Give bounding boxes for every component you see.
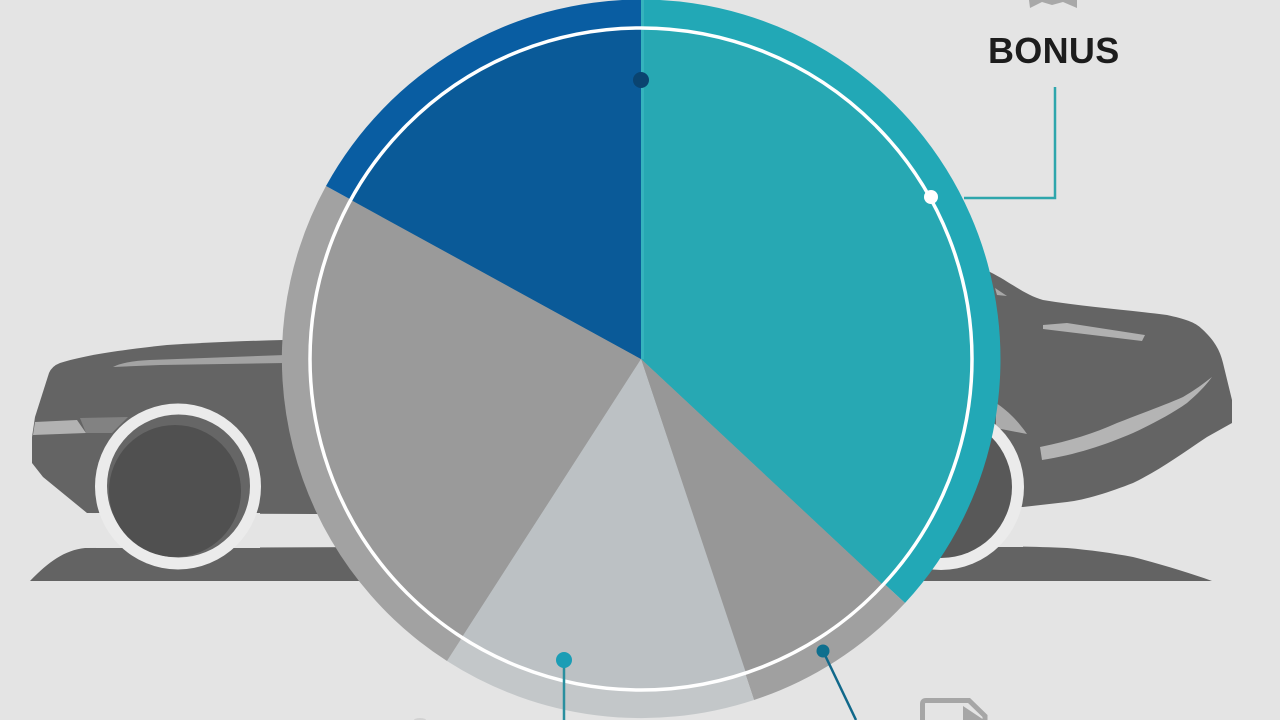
teal edge highlight xyxy=(641,0,644,359)
outer ring: left grey segment xyxy=(282,186,641,661)
car rear body xyxy=(32,340,400,514)
car rear ground shadow xyxy=(30,547,400,581)
slice: right grey xyxy=(641,359,883,673)
car rear light band xyxy=(80,417,128,433)
car rear wheel xyxy=(95,404,261,570)
car rear light xyxy=(33,420,86,435)
icon: bonus ribbon xyxy=(1029,0,1077,8)
outer ring: teal segment xyxy=(641,0,1000,603)
outer ring: right grey segment xyxy=(641,359,905,700)
outer ring: blue segment xyxy=(326,0,641,359)
icon: partial bottom-left mark xyxy=(414,718,426,720)
car front hood highlight xyxy=(1043,323,1145,341)
slice: light grey xyxy=(462,359,746,690)
car silhouette xyxy=(30,260,1232,581)
outer ring: light segment xyxy=(447,359,754,718)
slice: left grey xyxy=(310,200,641,637)
car front headlight xyxy=(996,403,1027,434)
heading: bonus: BONUS xyxy=(988,30,1120,71)
connector: bonus xyxy=(924,87,1055,204)
pie chart xyxy=(282,0,1000,718)
slice: blue xyxy=(351,28,641,359)
car front wheel xyxy=(858,404,1024,570)
connector: grey segment xyxy=(816,644,856,720)
car front side highlight xyxy=(1040,377,1212,460)
marker: blue segment xyxy=(633,72,649,88)
car front body xyxy=(930,260,1232,507)
icon: document xyxy=(922,700,985,720)
white ring xyxy=(310,28,972,690)
slice: teal xyxy=(641,28,972,585)
car rear top highlight xyxy=(113,355,285,367)
car front small highlight xyxy=(995,288,1007,296)
car front ground shadow xyxy=(900,547,1212,581)
connector: light segment xyxy=(556,652,572,720)
